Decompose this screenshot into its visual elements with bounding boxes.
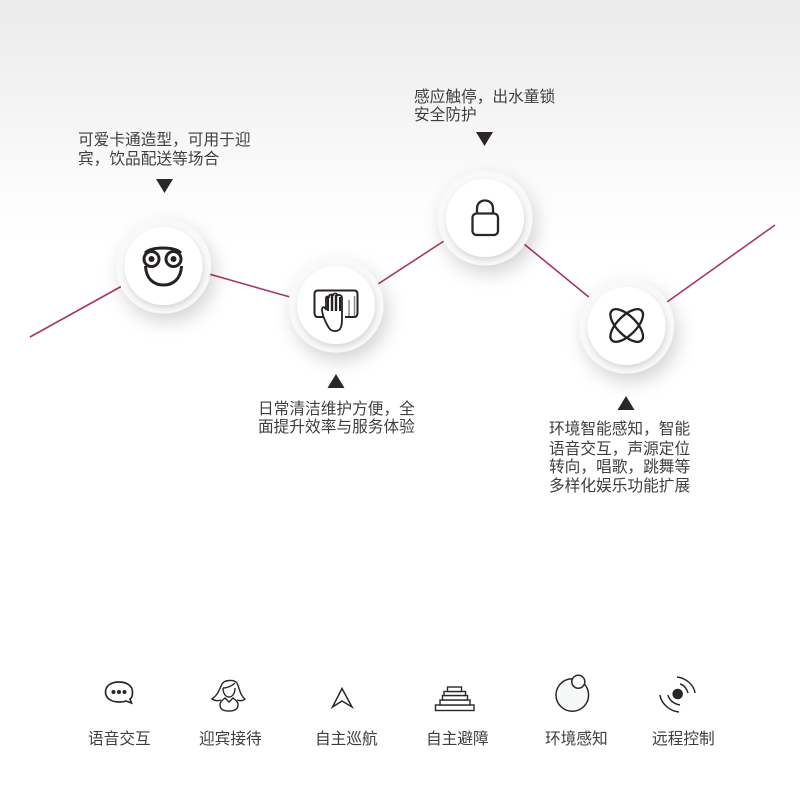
icon: stepped pyramid <box>436 687 474 710</box>
text: cartoon styling: 宾，饮品配送等场合 <box>78 150 219 168</box>
text: cartoon styling: 可爱卡通造型，可用于迎 <box>78 131 251 149</box>
icon: woman <box>212 680 245 711</box>
text: smart perception: 环境智能感知，智能 <box>549 419 690 438</box>
feature: remote control: 远程控制 <box>652 730 715 748</box>
arrow: up to hand <box>328 374 344 388</box>
feature: environment perception <box>545 675 608 748</box>
text: cartoon styling <box>78 131 251 168</box>
text: easy cleaning: 面提升效率与服务体验 <box>258 418 415 436</box>
node: atom <box>579 278 674 374</box>
arrow: down to lock <box>476 132 493 146</box>
icon: navigation arrow <box>332 688 352 707</box>
feature: remote control <box>652 677 715 748</box>
text: smart perception: 语音交互，声源定位 <box>549 440 690 458</box>
node: cleaning hand <box>288 258 384 352</box>
feature: obstacle avoidance <box>426 687 489 748</box>
text: touch stop: 安全防护 <box>414 106 477 124</box>
text: touch stop <box>414 87 555 124</box>
feature: reception: 迎宾接待 <box>199 730 262 748</box>
icon: speech bubble <box>106 682 132 703</box>
icon: lock <box>472 200 498 235</box>
node: lock <box>438 170 532 266</box>
feature: obstacle avoidance: 自主避障 <box>426 730 489 748</box>
icon: hand wiping panel <box>314 290 358 331</box>
feature: autonomous cruising: 自主巡航 <box>315 730 378 748</box>
node: cartoon face <box>116 218 211 314</box>
feature: reception <box>199 680 262 748</box>
icon: cartoon face <box>144 248 182 285</box>
feature: voice interaction <box>88 682 151 748</box>
icon: globe with small circle <box>556 675 589 711</box>
text: smart perception: 转向，唱歌，跳舞等 <box>549 458 690 476</box>
arrow: up to atom <box>618 396 634 410</box>
trend line <box>30 225 775 337</box>
text: smart perception <box>549 419 690 495</box>
text: easy cleaning <box>258 400 415 436</box>
text: smart perception: 多样化娱乐功能扩展 <box>549 477 690 495</box>
text: easy cleaning: 日常清洁维护方便，全 <box>258 400 415 418</box>
text: touch stop: 感应触停，出水童锁 <box>414 87 555 106</box>
feature: environment perception: 环境感知 <box>545 729 608 748</box>
feature: autonomous cruising <box>315 688 378 748</box>
arrow: down to face <box>156 179 173 193</box>
feature: voice interaction: 语音交互 <box>88 730 151 748</box>
icon: signal waves <box>660 677 695 712</box>
background gradient <box>0 0 800 240</box>
icon: atom orbits <box>605 304 648 347</box>
